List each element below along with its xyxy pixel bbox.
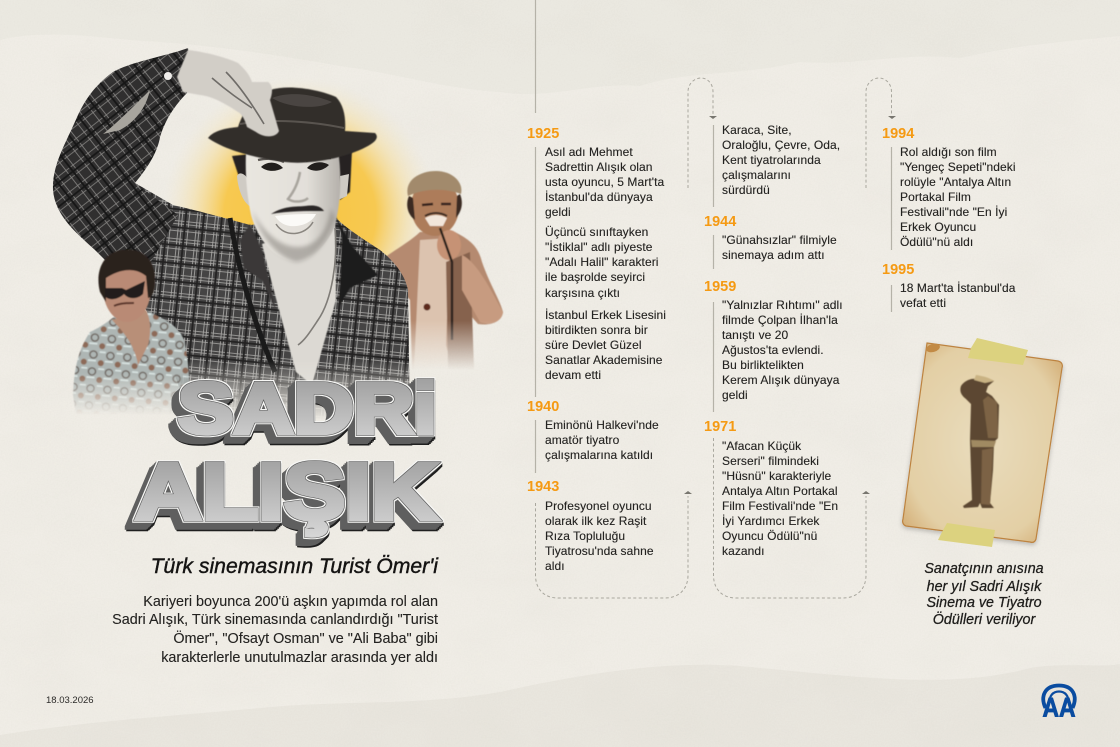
timeline: 1971: Antalya Altın Portakal: [722, 484, 838, 498]
timeline: 1943: Oraloğlu, Çevre, Oda,: [722, 138, 840, 152]
timeline: 1959: tanıştı ve 20: [722, 328, 789, 342]
caption: her yıl Sadri Alışık: [927, 579, 1042, 595]
timeline: 1925: usta oyuncu, 5 Mart'ta: [545, 175, 664, 189]
ears: [237, 173, 349, 208]
timeline: 1925: ile başrolde seyirci: [545, 270, 645, 284]
yellow sun glow: [162, 77, 438, 353]
timeline: 1995: 18 Mart'ta İstanbul'da: [900, 281, 1016, 295]
timeline: 1959: Bu birliktelikten: [722, 358, 804, 372]
timeline: 1994: 1994: [882, 126, 914, 142]
timeline: 1925: karşısına çıktı: [545, 286, 620, 300]
timeline: 1994: Festivali"nde "En İyi: [900, 205, 1007, 219]
photo: main portrait, Sadri Alışık in plaid shirt and hat: [53, 48, 410, 420]
face: [246, 150, 340, 262]
intro paragraph: Sadri Alışık, Türk sinemasında canlandırdığı "Turist: [112, 612, 438, 628]
timeline: 1971: "Hüsnü" karakteriyle: [722, 469, 832, 483]
timeline: 1925: "İstiklal" adlı piyeste: [545, 240, 653, 254]
timeline: 1944: sinemaya adım attı: [722, 248, 825, 262]
card: [903, 343, 1062, 542]
timeline: 1925: [527, 126, 666, 382]
timeline: 1925: İstanbul Erkek Lisesini: [545, 308, 666, 322]
timeline: 1943: [527, 123, 840, 573]
hand: [177, 50, 279, 136]
timeline: 1959: Ağustos'ta evlendi.: [722, 343, 824, 357]
caption: Sinema ve Tiyatro: [926, 595, 1042, 611]
eyebrow shadow: [258, 158, 331, 162]
AA logo: AA: [1042, 692, 1076, 722]
timeline: 1925: Asıl adı Mehmet: [545, 145, 633, 159]
photo: smiling man with cap and microphone: [378, 171, 503, 370]
timeline: 1994: Ödülü"nü aldı: [900, 235, 973, 249]
nose: [288, 172, 308, 202]
timeline: 1925: "Adalı Halil" karakteri: [545, 255, 659, 269]
tape top: [968, 338, 1028, 365]
hair: [232, 150, 352, 200]
timeline: 1994: Rol aldığı son film: [900, 145, 997, 159]
caption: Ödülleri veriliyor: [933, 610, 1036, 628]
timeline: 1940: Eminönü Halkevi'nde: [545, 418, 659, 432]
timeline: 1971: Oyuncu Ödülü"nü: [722, 529, 817, 543]
timeline: 1994: Portakal Film: [900, 190, 971, 204]
timeline: 1943: sürdürdü: [722, 183, 770, 197]
timeline: 1994: Erkek Oyuncu: [900, 220, 976, 234]
hat: [208, 88, 377, 163]
eyes: [261, 162, 329, 171]
timeline: 1959: geldi: [722, 388, 748, 402]
timeline: 1925: geldi: [545, 205, 571, 219]
timeline: 1944: [704, 214, 837, 262]
timeline: 1925: Sanatlar Akademisine: [545, 353, 663, 367]
timeline: 1959: 1959: [704, 279, 736, 295]
neck and chest: [262, 218, 336, 385]
timeline: 1940: amatör tiyatro: [545, 433, 620, 447]
timeline: 1995: [882, 262, 1016, 310]
title: Sadri Alışık: ALIŞIK: [135, 447, 438, 536]
smile: [275, 214, 316, 226]
collars: [335, 215, 378, 305]
timeline: 1940: çalışmalarına katıldı: [545, 448, 653, 462]
necklace: [298, 228, 336, 345]
timeline: 1943: Rıza Topluluğu: [545, 529, 625, 543]
timeline: 1925: Üçüncü sınıftayken: [545, 225, 648, 239]
photo: man with sunglasses and patterned shirt: [73, 250, 189, 415]
timeline: 1943: aldı: [545, 559, 565, 573]
timeline: 1971: 1971: [704, 419, 736, 435]
timeline: 1943: Kent tiyatrolarında: [722, 153, 821, 167]
timeline: 1971: [704, 419, 838, 558]
caption: Sanatçının anısına: [924, 561, 1044, 577]
timeline: 1925: devam etti: [545, 368, 601, 382]
timeline: 1943: Profesyonel oyuncu: [545, 499, 652, 513]
timeline: 1959: Kerem Alışık dünyaya: [722, 373, 840, 387]
timeline: 1959: filmde Çolpan İlhan'la: [722, 313, 838, 327]
timeline connectors: [536, 0, 896, 598]
intro paragraph: Ömer", "Ofsayt Osman" ve "Ali Baba" gibi: [173, 629, 438, 647]
figure silhouette: [960, 375, 999, 508]
title: Sadri Alışık: SADRi: [178, 370, 437, 449]
timeline: 1940: [527, 399, 659, 462]
subtitle: Türk sinemasının Turist Ömer'i: [151, 554, 439, 578]
tape bottom: [938, 523, 995, 547]
stubble and shading: [252, 208, 335, 262]
cuff button: [164, 72, 172, 80]
timeline: 1943: çalışmalarını: [722, 168, 791, 182]
timeline: 1925: Sadrettin Alışık olan: [545, 160, 653, 174]
timeline: 1944: 1944: [704, 214, 736, 230]
timeline: 1971: Film Festivali'nde "En: [722, 499, 838, 513]
timeline: 1971: "Afacan Küçük: [722, 439, 802, 453]
timeline: 1959: "Yalnızlar Rıhtımı" adlı: [722, 298, 843, 312]
timeline: 1994: [882, 126, 1016, 249]
timeline: 1925: İstanbul'da dünyaya: [545, 190, 653, 204]
timeline: 1944: "Günahsızlar" filmiyle: [722, 233, 837, 247]
timeline: 1925: bitirdikten sonra bir: [545, 323, 648, 337]
taped vintage photo card: [903, 338, 1062, 547]
intro paragraph: karakterlerle unutulmazlar arasında yer aldı: [161, 650, 438, 666]
finger creases: [212, 72, 264, 124]
timeline: 1971: İyi Yardımcı Erkek: [722, 514, 820, 528]
elbow highlight: [103, 90, 150, 134]
moustache: [271, 206, 324, 214]
title: Sadri Alışık: [135, 370, 438, 536]
intro paragraph: Kariyeri boyunca 200'ü aşkın yapımda rol alan: [143, 594, 438, 610]
shirt placket shadow: [230, 218, 275, 372]
timeline: 1940: 1940: [527, 399, 559, 415]
timeline: 1995: vefat etti: [900, 296, 946, 310]
shirt body: [135, 183, 410, 418]
timeline: 1943: Karaca, Site,: [722, 123, 792, 137]
timeline: 1994: "Yengeç Sepeti"ndeki: [900, 160, 1016, 174]
raised arm: [52, 48, 188, 262]
timeline: 1925: süre Devlet Güzel: [545, 338, 642, 352]
timeline: 1943: Tiyatrosu'nda sahne: [545, 544, 654, 558]
timeline: 1994: rolüyle "Antalya Altın: [900, 175, 1011, 189]
timeline: 1971: Serseri" filmindeki: [722, 454, 819, 468]
caption: [924, 561, 1044, 628]
timeline: 1995: 1995: [882, 262, 914, 278]
timeline: 1925: 1925: [527, 126, 559, 142]
timeline: 1971: kazandı: [722, 544, 765, 558]
timeline: 1943: 1943: [527, 479, 559, 495]
timeline: 1943: olarak ilk kez Raşit: [545, 514, 647, 528]
intro paragraph: [112, 594, 438, 666]
timeline: 1959: [704, 279, 843, 402]
date: 18.03.2026: [46, 695, 94, 706]
corner stain: [925, 342, 941, 354]
